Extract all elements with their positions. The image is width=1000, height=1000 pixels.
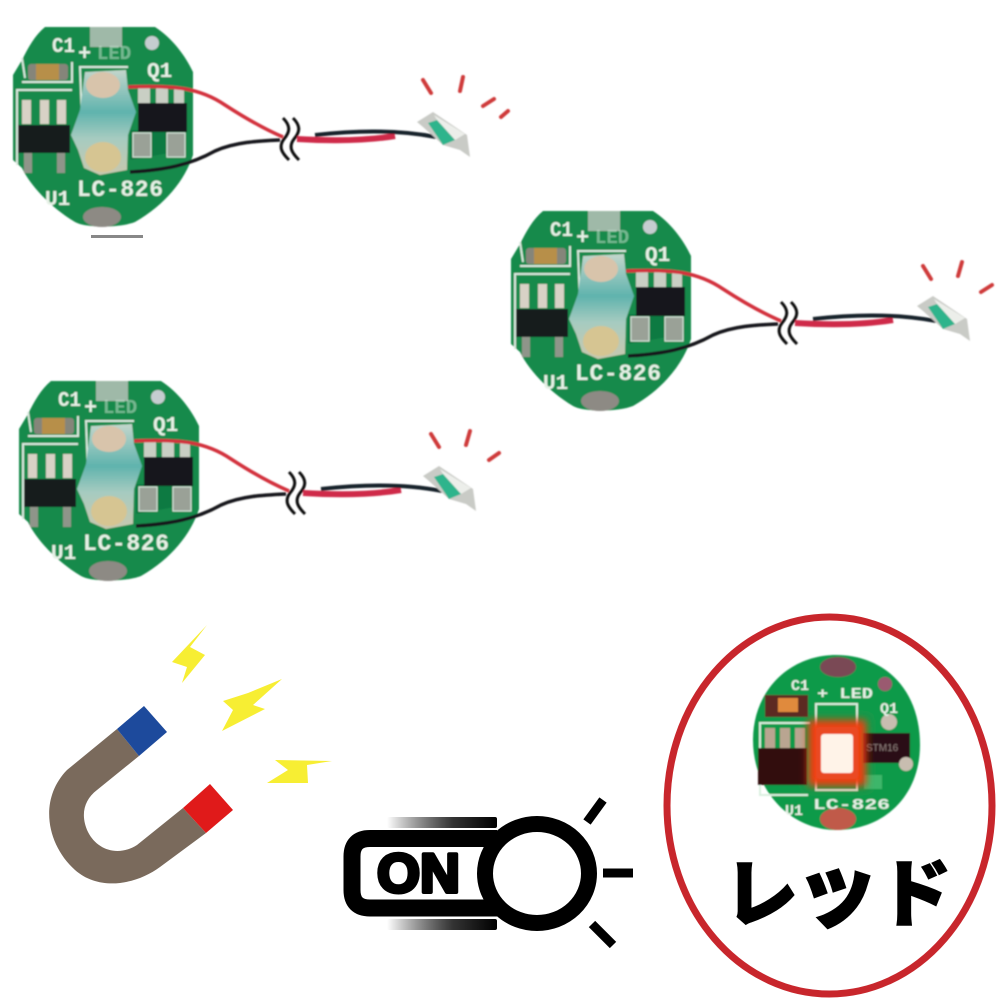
board labels: C1 [58, 390, 81, 413]
board body [511, 211, 691, 410]
switch body [352, 838, 497, 908]
light rays [423, 77, 508, 117]
spark two [222, 679, 282, 731]
bottom solder pad [581, 391, 619, 411]
board labels: U1 [45, 189, 70, 212]
chip U1 [758, 723, 810, 795]
bottom solder pad [89, 561, 127, 581]
board labels: C1 [550, 220, 573, 243]
paired wires to LED [297, 132, 436, 140]
red outline [667, 617, 992, 994]
motion bars [387, 817, 497, 930]
chip U1 [515, 274, 570, 357]
chip Q1 [136, 442, 193, 514]
label: red: レ [724, 853, 798, 936]
board labels: + [78, 42, 91, 67]
small LED [917, 296, 970, 341]
board labels: + [84, 396, 97, 421]
capacitor C1 [520, 242, 570, 266]
board labels: C1 [52, 36, 75, 59]
board body [753, 655, 920, 830]
board labels: C1 [791, 678, 809, 695]
small LED [417, 112, 470, 157]
ON text: ON [377, 842, 460, 904]
board labels: Q1 [645, 245, 670, 268]
light rays [923, 262, 992, 292]
board labels: LC-826 [813, 797, 890, 814]
red wire [134, 440, 289, 491]
icon: yellow sparks [172, 625, 332, 783]
light rays [431, 431, 499, 460]
magnet body [49, 729, 206, 883]
lamp ring [485, 824, 589, 923]
LED outline [816, 704, 857, 790]
chip Q1 [130, 88, 187, 160]
glue solder spots [91, 426, 127, 526]
board labels: + [576, 226, 589, 251]
LED glow core [816, 727, 858, 779]
lit board [753, 655, 920, 830]
wire break mark [281, 118, 299, 160]
scan artefact under top board [91, 235, 143, 238]
top solder blob [588, 211, 620, 231]
chip Q1 [628, 272, 685, 344]
callout: red LED state [667, 617, 992, 994]
lamp rays [587, 800, 633, 945]
board labels: U1 [51, 543, 76, 566]
panel: circuit board with wired LED, lower left [19, 381, 499, 581]
label: red: ド [878, 853, 952, 936]
mounting hole [151, 390, 165, 404]
chip marking: STM16 [866, 743, 899, 754]
paired wires to LED [795, 316, 936, 324]
paired wires to LED [303, 486, 442, 494]
board body [19, 381, 199, 580]
icon: ON switch with lit lamp [352, 800, 633, 945]
mounting hole [145, 36, 159, 50]
solder pads and hole [820, 657, 892, 830]
board labels: Q1 [153, 415, 178, 438]
wire break mark [287, 472, 305, 514]
glue blob over LED [77, 424, 142, 529]
board labels: LC-826 [77, 177, 163, 203]
wire break mark [779, 302, 797, 344]
LED footprint outline [80, 67, 128, 120]
top solder blob [96, 381, 128, 401]
panel: circuit board with wired LED, top left [13, 27, 508, 227]
spark one [172, 625, 207, 683]
label: red: ッ [795, 844, 879, 938]
board labels: Q1 [880, 701, 898, 718]
black wire [130, 140, 280, 172]
glue solder spots [583, 256, 619, 356]
capacitor C1 [22, 58, 72, 82]
red glow [808, 720, 866, 786]
LED footprint outline [86, 421, 134, 474]
glue solder spots [85, 72, 121, 172]
board labels: LED [595, 227, 629, 249]
icon: horseshoe magnet [49, 706, 233, 883]
top solder blob [90, 27, 122, 47]
board labels [45, 36, 172, 212]
glue blob over LED [71, 70, 136, 175]
capacitor C1 [28, 412, 78, 436]
board labels [785, 678, 898, 820]
capacitor C1 [765, 695, 808, 717]
board labels: LED [103, 397, 137, 419]
blue pole [117, 706, 167, 756]
board labels: LC-826 [83, 531, 169, 557]
board labels: U1 [785, 803, 803, 820]
glue blob over LED [569, 254, 634, 359]
LED centre [821, 734, 853, 773]
board body [13, 27, 193, 226]
board labels [51, 390, 178, 566]
black wire [628, 324, 778, 356]
LED footprint outline [578, 251, 626, 304]
small LED [423, 466, 476, 511]
red wire [626, 270, 781, 321]
chip Q1 [863, 714, 913, 789]
bottom solder pad [83, 207, 121, 227]
board labels [543, 220, 670, 396]
chip U1 [23, 444, 78, 527]
mounting hole [643, 220, 657, 234]
black wire [136, 494, 286, 526]
spark three [267, 760, 332, 783]
board labels: + LED [817, 686, 873, 703]
panel: circuit board with wired LED, middle right [511, 211, 992, 411]
red wire [128, 86, 283, 137]
board labels: LED [97, 43, 131, 65]
board labels: LC-826 [575, 361, 661, 387]
board labels: Q1 [147, 61, 172, 84]
red pole [183, 784, 233, 833]
chip U1 [17, 90, 72, 173]
board labels: U1 [543, 373, 568, 396]
